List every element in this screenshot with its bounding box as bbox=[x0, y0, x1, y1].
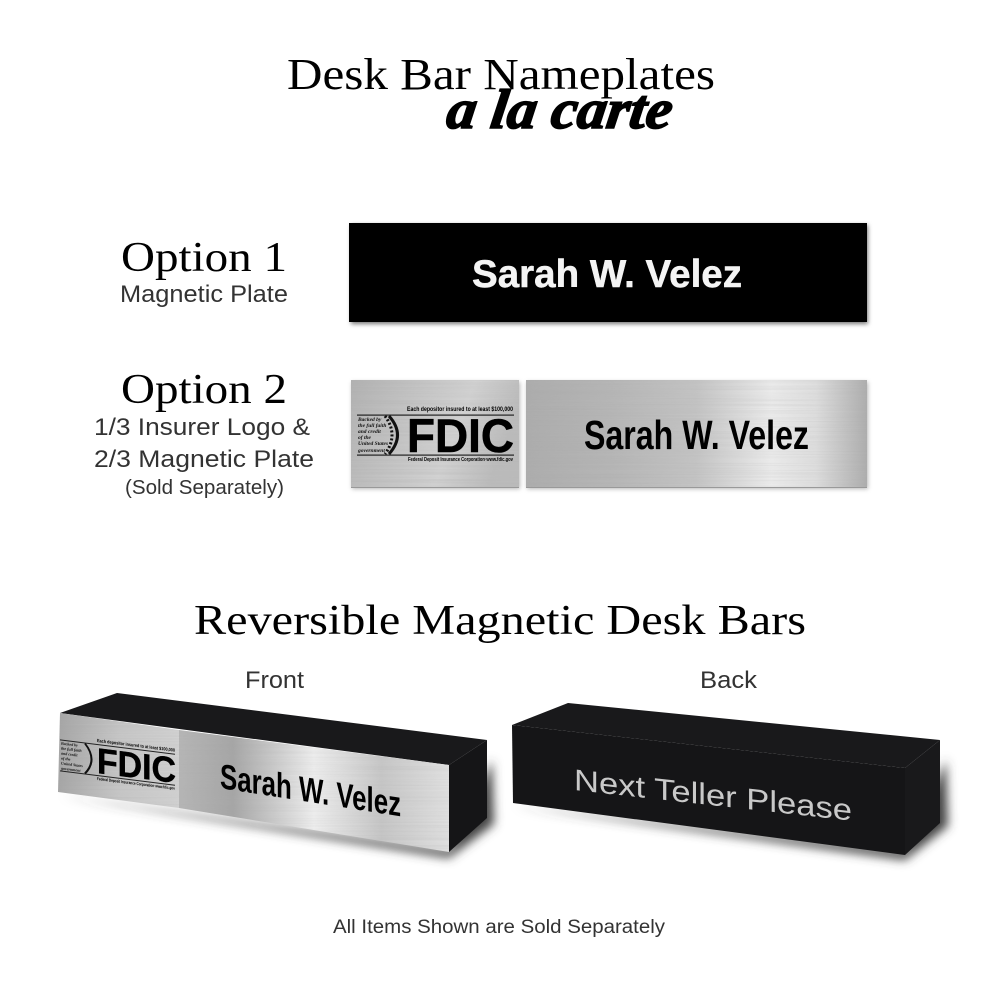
FDIC logo: government bbox=[357, 448, 385, 454]
front desk bar bbox=[58, 693, 494, 858]
right side bbox=[449, 740, 487, 852]
FDIC logo: of the bbox=[358, 435, 372, 441]
FDIC metal plate bbox=[351, 380, 520, 489]
front logo: Each depositor insured to at least $100,000 bbox=[97, 738, 175, 753]
option 2 label: 1/3 Insurer Logo & bbox=[94, 414, 310, 441]
front logo: the full faith bbox=[61, 746, 82, 753]
option 1 label bbox=[120, 235, 288, 308]
FDIC logo: Federal Deposit Insurance Corporation·www.fdic.gov bbox=[408, 457, 514, 463]
option 2 label bbox=[94, 367, 314, 499]
back front face bbox=[512, 725, 905, 855]
option 2 label: (Sold Separately) bbox=[125, 477, 284, 499]
front logo: of the bbox=[61, 756, 71, 762]
front logo: government bbox=[60, 765, 81, 773]
name metal plate bbox=[526, 380, 868, 489]
FDIC logo: Backed by bbox=[357, 417, 382, 423]
front name: Sarah W. Velez bbox=[220, 757, 401, 824]
back right side bbox=[905, 740, 940, 855]
black magnetic plate: Sarah W. Velez bbox=[472, 253, 742, 296]
script subtitle: a la carte bbox=[443, 79, 677, 141]
option 1 label: Option 1 bbox=[121, 235, 287, 281]
FDIC logo: FDIC bbox=[407, 409, 514, 462]
section heading: Reversible Magnetic Desk Bars bbox=[194, 598, 806, 644]
title: Desk Bar Nameplates bbox=[287, 50, 715, 99]
name plate face bbox=[179, 730, 449, 852]
logo plate face bbox=[58, 713, 179, 808]
FDIC logo: United States bbox=[358, 441, 388, 447]
front logo: and credit bbox=[61, 751, 78, 758]
black magnetic plate bbox=[349, 223, 868, 324]
back desk bar bbox=[512, 703, 948, 860]
FDIC logo bbox=[357, 406, 514, 463]
top face bbox=[60, 693, 487, 765]
option 2 label: 2/3 Magnetic Plate bbox=[94, 446, 314, 473]
front label: Front bbox=[245, 667, 304, 694]
FDIC logo: Each depositor insured to at least $100,000 bbox=[407, 406, 513, 413]
front logo: FDIC bbox=[97, 740, 176, 791]
FDIC logo: the full faith bbox=[358, 423, 386, 429]
back message: Next Teller Please bbox=[574, 764, 852, 828]
front logo: United States bbox=[61, 761, 83, 768]
front logo: Backed by bbox=[60, 740, 78, 748]
title bbox=[287, 50, 715, 141]
name metal plate: Sarah W. Velez bbox=[584, 412, 809, 458]
back label: Back bbox=[700, 667, 758, 694]
back top face bbox=[512, 703, 940, 768]
footer note: All Items Shown are Sold Separately bbox=[333, 917, 666, 938]
FDIC logo: and credit bbox=[358, 429, 381, 435]
front logo bbox=[60, 733, 176, 791]
option 2 label: Option 2 bbox=[121, 367, 287, 413]
front logo: Federal Deposit Insurance Corporation·www.fdic.gov bbox=[97, 776, 175, 791]
option 1 label: Magnetic Plate bbox=[120, 281, 288, 308]
